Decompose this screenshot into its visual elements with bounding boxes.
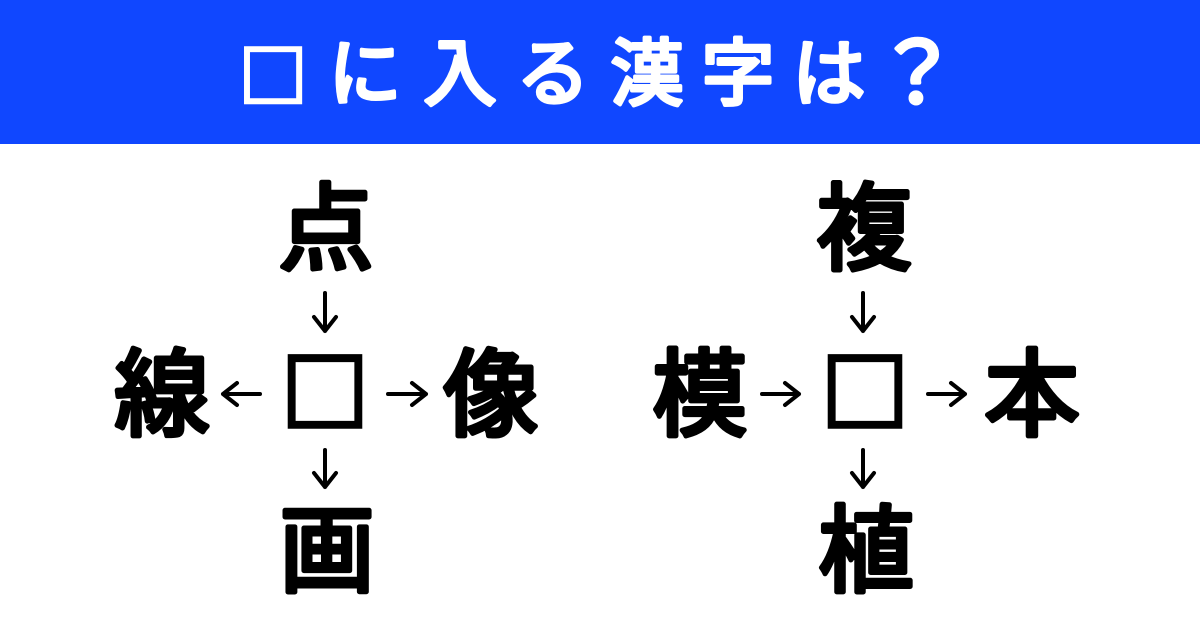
puzzle: right: 本 xyxy=(984,343,1080,449)
puzzle: left: 点 xyxy=(278,177,374,283)
title banner xyxy=(0,0,1200,144)
title banner: ？ xyxy=(875,27,959,121)
title banner: る xyxy=(516,34,590,115)
puzzle: right xyxy=(652,177,1080,605)
puzzle: right: 複 xyxy=(816,177,912,283)
puzzle: right: □ xyxy=(829,320,901,453)
puzzle: right: 模 xyxy=(652,343,748,449)
puzzle: left: 画 xyxy=(279,499,375,605)
puzzle: left: □ xyxy=(289,320,361,453)
title banner: □ xyxy=(245,19,301,123)
puzzle: right: 植 xyxy=(818,499,914,605)
title banner: 漢 xyxy=(610,34,684,115)
title banner: 字 xyxy=(702,34,774,115)
puzzle: left: 像 xyxy=(443,343,539,449)
puzzle: left: 線 xyxy=(114,343,210,449)
puzzle: left xyxy=(114,177,539,605)
title banner: に xyxy=(328,34,402,115)
title banner: 入 xyxy=(424,34,496,115)
title banner: は xyxy=(792,34,866,115)
